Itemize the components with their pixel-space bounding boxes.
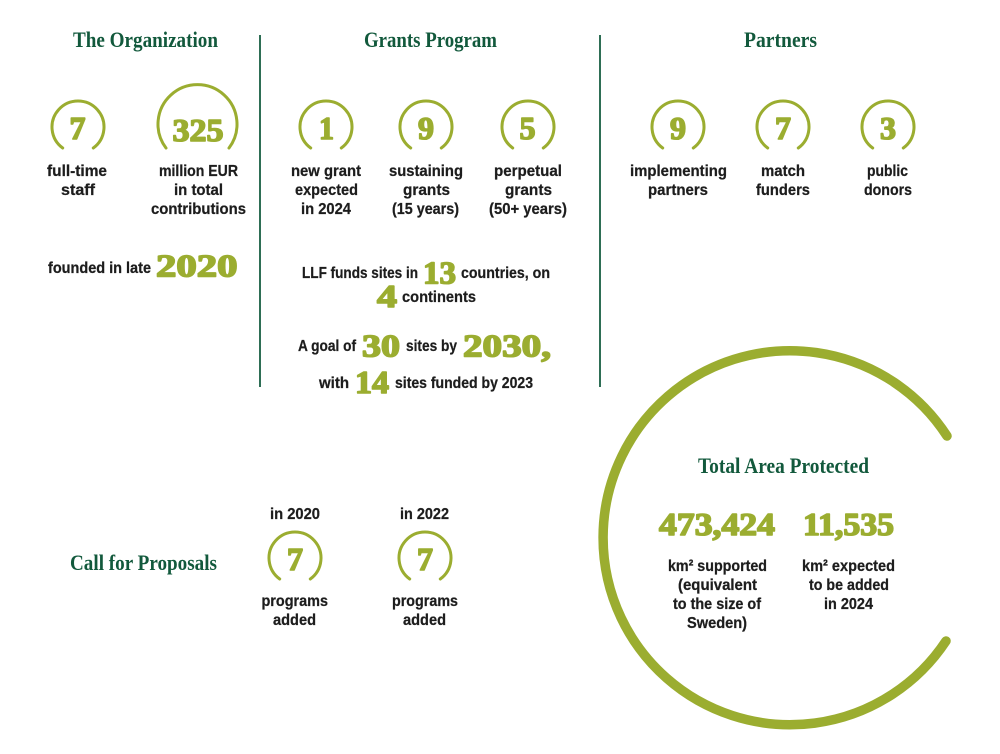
text: A goal of 30 sites by 2030: A goal of — [298, 338, 357, 355]
text: A goal of 30 sites by 2030: 30 — [362, 328, 400, 364]
text: A goal of 30 sites by 2030 — [298, 328, 551, 364]
stat: in 2022, 7 programs added: in 2022 — [400, 506, 449, 523]
panel: Grants Program — [291, 27, 567, 400]
stat: 7 match funders: funders — [756, 182, 810, 199]
stat: 7 full-time staff: 7 — [70, 110, 86, 146]
text: LLF funds sites in 13 countries, on 4 continents: 13 — [423, 254, 456, 290]
stat: 3 public donors: 3 — [880, 110, 896, 146]
heading: Grants Program: Grants Program — [364, 27, 497, 52]
heading: Partners: Partners — [744, 27, 817, 52]
stat: 473,424 km² supported: (equivalent — [678, 577, 758, 594]
stat: in 2022, 7 programs added: added — [403, 612, 446, 629]
stat: 5 perpetual grants: 5 — [520, 110, 536, 146]
heading: Call for Proposals: Call for Proposals — [70, 550, 217, 575]
text: with 14 sites funded by 2023: sites funded by 2023 — [395, 375, 533, 392]
text: LLF funds sites in 13 countries, on 4 continents: countries, on — [461, 265, 550, 282]
stat: 7 match funders — [756, 101, 810, 199]
text: with 14 sites funded by 2023 — [318, 364, 533, 400]
heading: The Organization: The Organization — [73, 27, 218, 52]
stat: 1 new grant: 1 — [319, 110, 334, 146]
stat: in 2020, 7 programs added: 7 — [287, 541, 303, 577]
panel: The Organization — [47, 27, 246, 284]
stat: 9 implementing partners: 9 — [670, 110, 686, 146]
stat: 11,535 km² expected: in 2024 — [824, 596, 873, 613]
stat: 9 sustaining grants: 9 — [418, 110, 434, 146]
panel: Total Area Protected — [603, 351, 947, 725]
stat: 325 million EUR in total contributions — [151, 85, 246, 218]
panel: Partners — [630, 27, 914, 199]
stat: 3 public donors: donors — [864, 182, 912, 199]
text: A goal of 30 sites by 2030: 2030, — [463, 328, 551, 364]
heading: Total Area Protected: Total Area Protected — [698, 453, 869, 478]
text: with 14 sites funded by 2023: 14 — [355, 364, 389, 400]
stat: 1 new grant: in 2024 — [301, 201, 351, 218]
text: LLF funds sites in 13 countries, on 4 continents: continents — [402, 289, 476, 306]
stat: 5 perpetual grants: (50+ years) — [489, 201, 567, 218]
stat: in 2022, 7 programs added — [392, 506, 458, 629]
stat: 9 implementing partners — [630, 101, 727, 199]
stat: 9 sustaining grants: (15 years) — [392, 201, 459, 218]
panel: Call for Proposals — [70, 506, 458, 629]
stat: 7 match funders: match — [761, 163, 805, 180]
stat: 7 full-time staff: staff — [61, 182, 96, 199]
stat: 473,424 km² supported: to the size of — [673, 596, 762, 613]
stat: 325 million EUR in total contributions: 325 — [172, 112, 224, 148]
large open circle — [603, 351, 947, 725]
stat: 11,535 km² expected: km² expected — [802, 558, 895, 575]
stat: 5 perpetual grants — [489, 101, 567, 218]
stat: 9 implementing partners: implementing — [630, 163, 727, 180]
stat: in 2022, 7 programs added: 7 — [417, 541, 433, 577]
text: founded in late 2020: founded in late — [48, 260, 151, 277]
stat: 473,424 km² supported: 473,424 — [659, 506, 775, 542]
stat: 9 sustaining grants — [389, 101, 463, 218]
stat: 7 full-time staff — [47, 101, 107, 199]
stat: 473,424 km² supported — [659, 506, 775, 632]
stat: in 2020, 7 programs added: in 2020 — [270, 506, 320, 523]
stat: 7 full-time staff: full-time — [47, 163, 107, 180]
stat: 5 perpetual grants: perpetual — [494, 163, 562, 180]
stat: 1 new grant — [291, 101, 362, 218]
stat: in 2020, 7 programs added: added — [273, 612, 316, 629]
stat: 5 perpetual grants: grants — [505, 182, 552, 199]
text: founded in late 2020 — [48, 248, 238, 284]
stat: 325 million EUR in total contributions: million EUR — [159, 163, 238, 180]
stat: 3 public donors: public — [867, 163, 908, 180]
stat: 1 new grant: expected — [295, 182, 358, 199]
text: with 14 sites funded by 2023: with — [318, 375, 349, 392]
stat: in 2020, 7 programs added — [262, 506, 328, 629]
stat: 325 million EUR in total contributions: in total — [174, 182, 223, 199]
stat: 7 match funders: 7 — [775, 110, 791, 146]
text: founded in late 2020: 2020 — [156, 248, 238, 284]
stat: 11,535 km² expected — [802, 506, 895, 613]
stat: in 2020, 7 programs added: programs — [262, 593, 328, 610]
stat: 9 sustaining grants: sustaining — [389, 163, 463, 180]
stat: 325 million EUR in total contributions: contributions — [151, 201, 246, 218]
text: LLF funds sites in 13 countries, on 4 continents: LLF funds sites in — [302, 265, 418, 282]
stat: 1 new grant: new grant — [291, 163, 362, 180]
stat: 473,424 km² supported: Sweden) — [687, 615, 747, 632]
stat: 9 sustaining grants: grants — [403, 182, 450, 199]
stat: 9 implementing partners: partners — [648, 182, 708, 199]
text: LLF funds sites in 13 countries, on 4 continents — [302, 254, 550, 314]
stat: in 2022, 7 programs added: programs — [392, 593, 458, 610]
stat: 11,535 km² expected: 11,535 — [803, 506, 894, 542]
text: A goal of 30 sites by 2030: sites by — [406, 338, 457, 355]
text: LLF funds sites in 13 countries, on 4 continents: 4 — [377, 278, 397, 314]
stat: 473,424 km² supported: km² supported — [668, 558, 767, 575]
stat: 11,535 km² expected: to be added — [809, 577, 889, 594]
stat: 3 public donors — [862, 101, 914, 199]
